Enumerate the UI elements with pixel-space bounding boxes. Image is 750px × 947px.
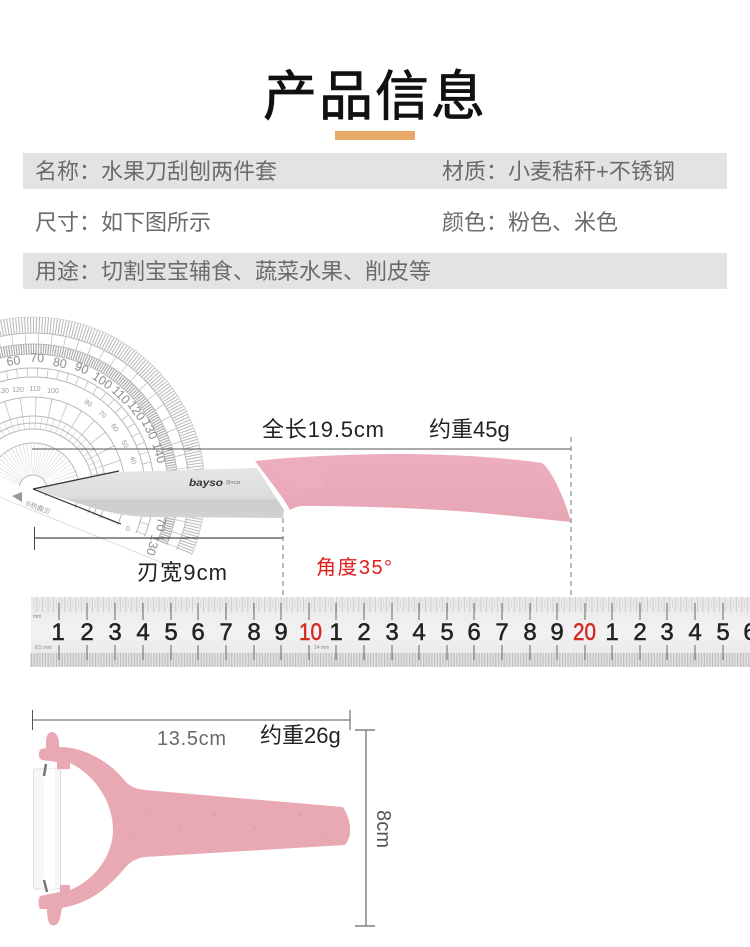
- ruler numbers: [51, 619, 750, 646]
- blade brand: bayso: [189, 477, 224, 489]
- protractor scale numbers: [0, 351, 169, 557]
- protractor scale numbers: 70: [97, 410, 107, 420]
- ruler numbers: 4: [412, 619, 426, 646]
- ruler: [30, 597, 750, 667]
- handle texture: [276, 464, 325, 490]
- protractor scale numbers: 120: [124, 398, 148, 423]
- dimension: peeler length: [32, 710, 350, 730]
- title: 产品信息: [263, 67, 485, 127]
- protractor scale numbers: 70: [30, 351, 44, 365]
- blade brand: 贝YCO: [226, 480, 241, 486]
- ruler numbers: 2: [357, 619, 371, 646]
- knife handle: [255, 454, 571, 522]
- spec: usage: 用途：切割宝宝辅食、蔬菜水果、削皮等: [35, 259, 431, 284]
- panel: product specs: [23, 153, 727, 289]
- label: total length: 全长19.5cm: [262, 417, 384, 442]
- protractor scale numbers: 40: [128, 456, 137, 465]
- blade brand: [189, 477, 241, 489]
- protractor scale numbers: 130: [139, 417, 160, 442]
- ruler small marks: mm: [33, 614, 41, 620]
- protractor scale numbers: 0: [126, 526, 130, 533]
- peeler: [34, 732, 350, 925]
- dimension: knife total length line: [32, 448, 571, 450]
- ruler numbers: 2: [633, 619, 647, 646]
- peeler blade: [34, 764, 60, 892]
- ruler numbers: 5: [716, 619, 730, 646]
- dimension: blade length: [34, 437, 571, 595]
- protractor scale numbers: 80: [52, 355, 68, 371]
- peeler handle: [38, 732, 350, 925]
- ruler numbers: 9: [274, 619, 288, 646]
- protractor: [0, 316, 204, 570]
- ruler numbers: 3: [385, 619, 399, 646]
- title underline accent: [335, 131, 415, 140]
- spec: size: 尺寸：如下图所示: [35, 210, 211, 235]
- ruler numbers: 6: [191, 619, 205, 646]
- protractor scale numbers: 140: [149, 441, 168, 465]
- protractor scale numbers: 110: [109, 383, 133, 407]
- ruler numbers: 1: [605, 619, 619, 646]
- ruler numbers: 4: [688, 619, 702, 646]
- spec row background 1: [23, 153, 727, 189]
- ruler numbers: 7: [495, 619, 509, 646]
- ruler small marks: 8.5 mm: [35, 645, 52, 651]
- ruler small marks: 14 mm: [314, 645, 329, 651]
- handle speckles: [94, 759, 326, 841]
- protractor scale numbers: 100: [90, 369, 115, 392]
- ruler numbers: 5: [440, 619, 454, 646]
- ruler numbers: 8: [247, 619, 261, 646]
- ruler numbers: 20: [573, 619, 596, 646]
- label: angle: 角度35°: [316, 556, 392, 579]
- label: peeler length: 13.5cm: [157, 728, 226, 750]
- protractor scale numbers: 80: [83, 399, 93, 409]
- ruler numbers: 9: [550, 619, 564, 646]
- dimension: peeler height: [355, 730, 375, 926]
- protractor logo: ®热鼎贝: [24, 499, 52, 517]
- ruler numbers: 1: [51, 619, 65, 646]
- spec: name: 名称：水果刀刮刨两件套: [35, 159, 277, 184]
- protractor scale numbers: 60: [6, 353, 21, 369]
- spec: material: 材质：小麦秸秆+不锈钢: [442, 159, 675, 184]
- protractor logo: [12, 492, 52, 517]
- ruler numbers: 7: [219, 619, 233, 646]
- label: knife weight: 约重45g: [429, 417, 510, 442]
- ruler numbers: 2: [80, 619, 94, 646]
- protractor scale numbers: 110: [29, 386, 41, 393]
- knife blade: [33, 468, 284, 518]
- ruler numbers: 1: [329, 619, 343, 646]
- protractor scale numbers: 130: [143, 533, 162, 557]
- ruler numbers: 3: [660, 619, 674, 646]
- protractor scale numbers: 120: [12, 387, 24, 394]
- protractor scale numbers: 70: [153, 517, 169, 532]
- protractor scale numbers: 50: [119, 439, 129, 449]
- label: peeler height: 8cm: [372, 810, 394, 848]
- ruler numbers: 3: [108, 619, 122, 646]
- protractor scale numbers: 100: [47, 388, 59, 395]
- ruler numbers: 5: [164, 619, 178, 646]
- ruler numbers: 6: [467, 619, 481, 646]
- angle guide lines: [33, 471, 121, 524]
- ruler numbers: 4: [136, 619, 150, 646]
- ruler long ticks: [59, 603, 723, 660]
- ruler small marks: [33, 614, 329, 651]
- protractor scale numbers: 60: [109, 423, 119, 433]
- label: blade width: 刃宽9cm: [137, 560, 227, 585]
- protractor scale numbers: 90: [72, 359, 91, 378]
- ruler numbers: 10: [299, 619, 322, 646]
- knife: [33, 454, 571, 524]
- spec row background 3: [23, 253, 727, 289]
- label: peeler weight: 约重26g: [260, 723, 341, 748]
- ruler numbers: 8: [523, 619, 537, 646]
- spec: colour: 颜色：粉色、米色: [442, 210, 618, 235]
